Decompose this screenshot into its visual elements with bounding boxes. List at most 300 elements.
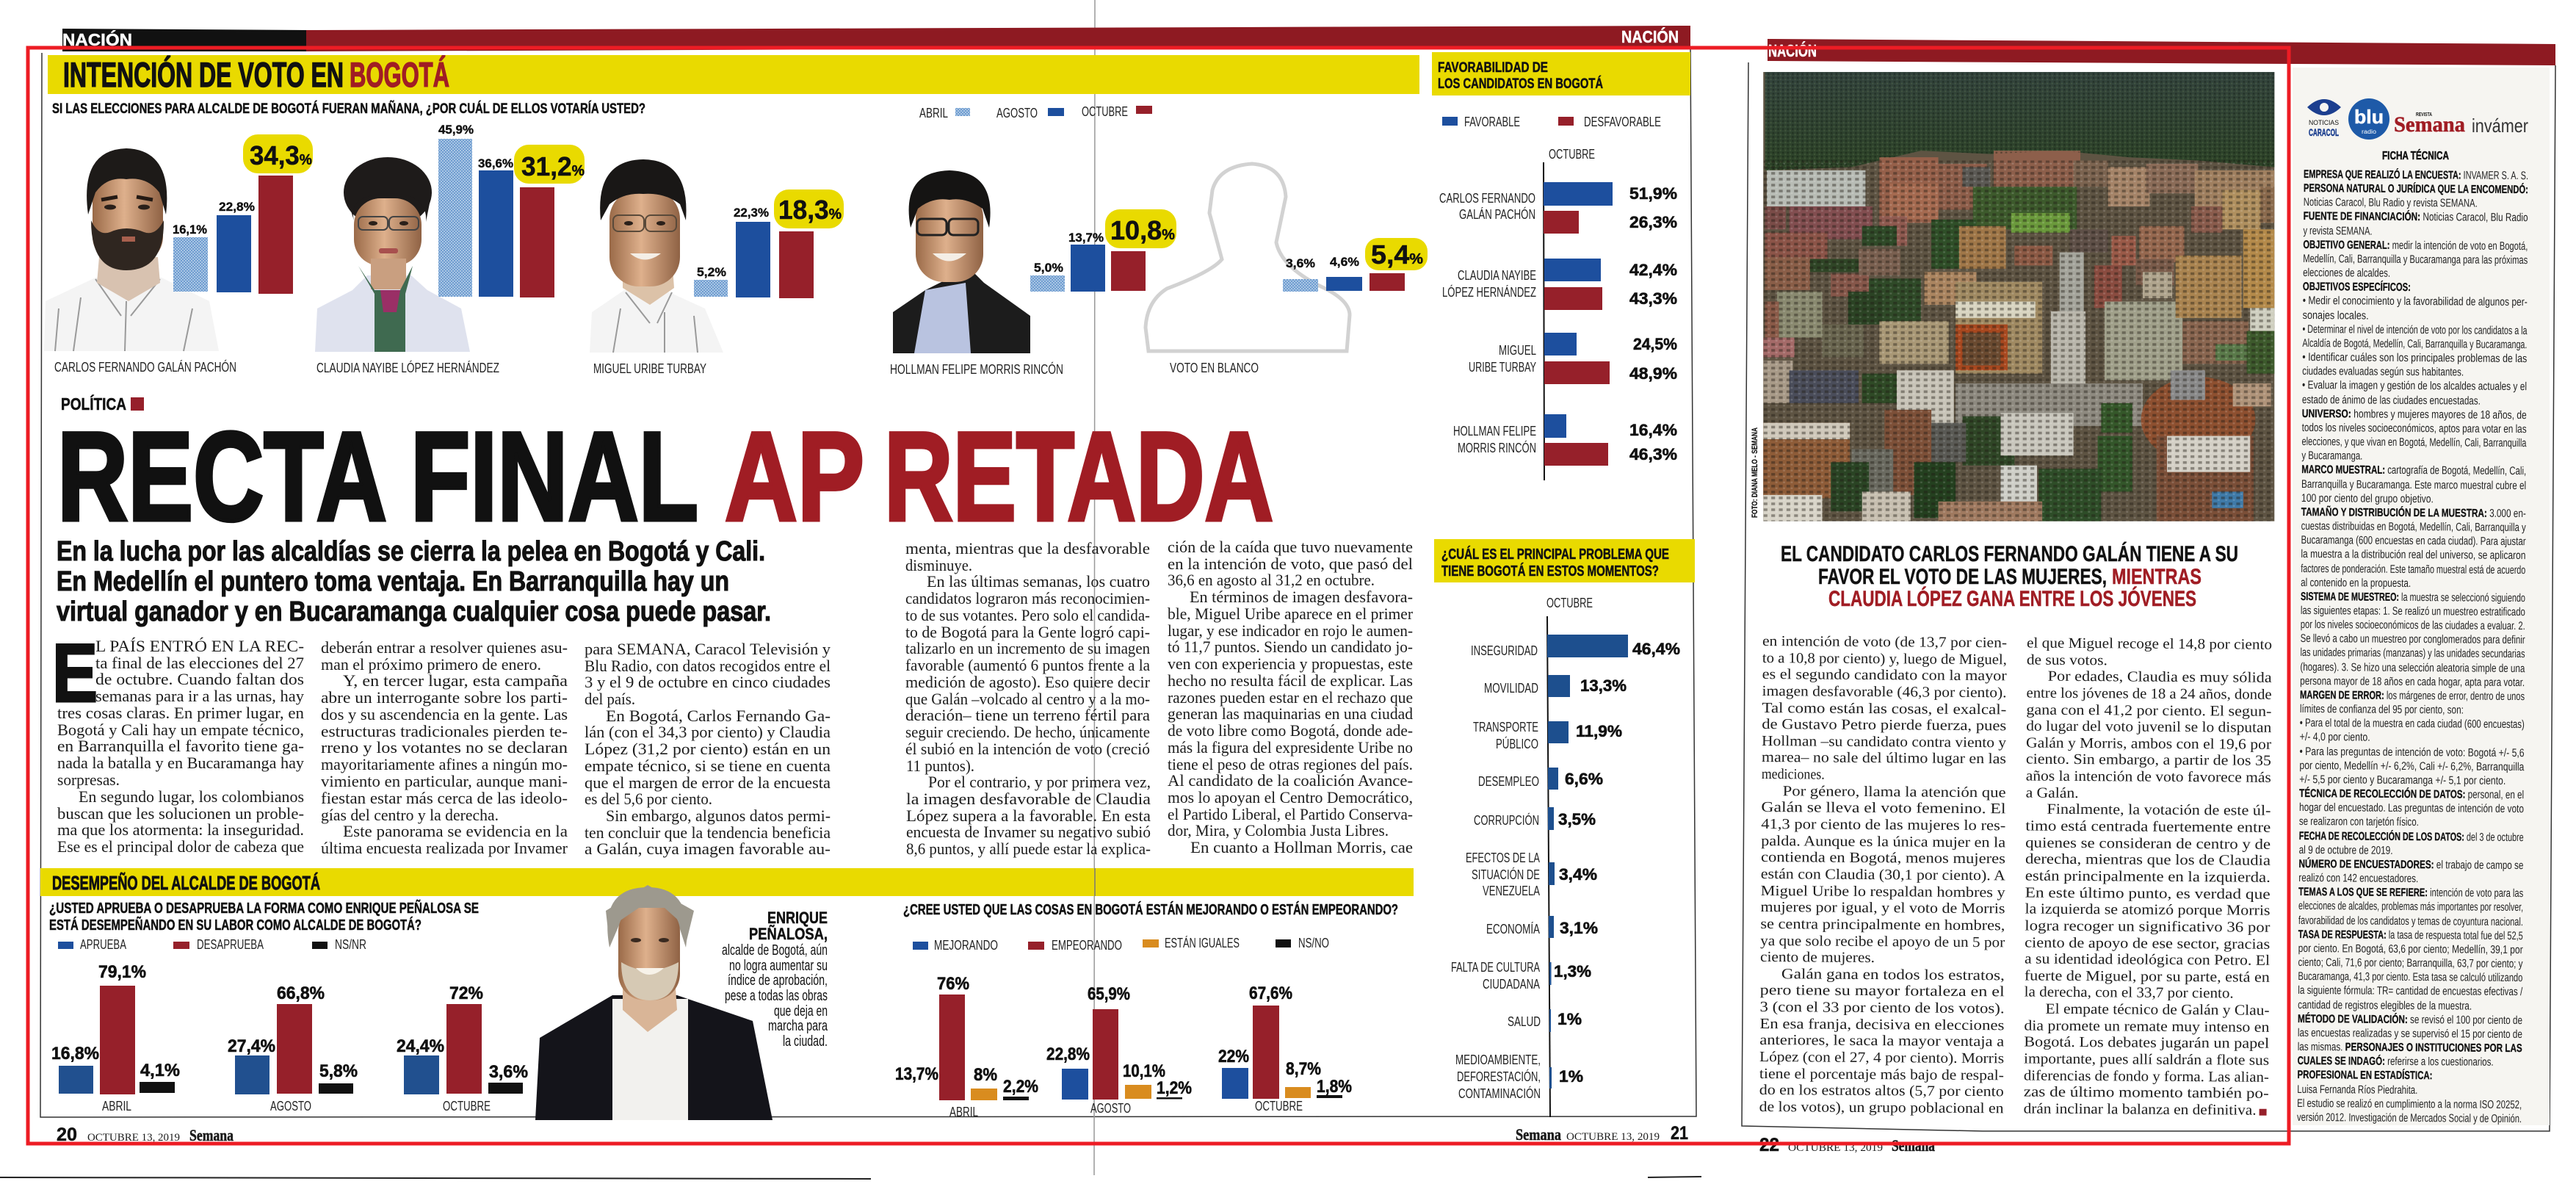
article page 22 column 1: en intención de voto (de 13,7 por cien- bbox=[1762, 633, 2007, 651]
article page 22 column 2: Finalmente, la votación de este úl- bbox=[2047, 801, 2271, 819]
ficha técnica text: FECHA DE RECOLECCIÓN DE LOS DATOS: del 3 de octubre bbox=[2299, 829, 2524, 844]
row: López: 43,3% bbox=[1629, 289, 1677, 308]
article column 3: Blu Radio, con datos recogidos entre el bbox=[585, 657, 831, 675]
callout: Galán bbox=[243, 134, 313, 173]
callout: Uribe: 18,3% bbox=[778, 195, 842, 225]
article page 22 column 1: marea– no sale del último lugar en las bbox=[1762, 749, 2006, 767]
row: López bbox=[1442, 259, 1677, 310]
callout: López: 31,2% bbox=[521, 151, 585, 181]
caption: Peñalosa: PEÑALOSA, bbox=[749, 925, 828, 943]
chart: mejorando abril: 8% bbox=[974, 1065, 997, 1085]
ficha técnica text: • Identificar cuáles son los principales problemas de las bbox=[2302, 351, 2528, 365]
chart: aprobación octubre bbox=[397, 983, 528, 1113]
article column 5: lugar, y ese indicador en rojo le aumen- bbox=[1168, 621, 1413, 640]
article column 4: to de Bogotá para la Gente logró capi- bbox=[905, 623, 1150, 641]
article column 5: ción de la caída que tuvo nuevamente bbox=[1168, 538, 1413, 556]
main headline bbox=[57, 406, 1273, 547]
center fold bbox=[1094, 0, 1095, 1175]
article page 22 column 1: Por género, llama la atención que bbox=[1783, 783, 2006, 801]
legend: mejorando: ESTÁN IGUALES bbox=[1165, 936, 1240, 950]
footer: page 22: OCTUBRE 13, 2019 bbox=[1788, 1142, 1883, 1154]
logo: Blu Radio: blu bbox=[2354, 106, 2384, 128]
logo: Semana: Semana bbox=[2394, 112, 2465, 137]
row: cultura ciudadana: FALTA DE CULTURA bbox=[1451, 960, 1540, 975]
row: corrupción: 3,5% bbox=[1558, 810, 1596, 829]
ficha técnica text: ciudades evaluadas según sus habitantes. bbox=[2302, 365, 2464, 379]
header label page 22: NACIÓN bbox=[1768, 40, 1817, 60]
article page 22 column 1: anteriores, le saca la mayor ventaja a bbox=[1759, 1032, 2004, 1050]
caption: Peñalosa: ENRIQUE bbox=[767, 909, 828, 927]
article column 2: deberán entrar a resolver quienes asu- bbox=[321, 638, 568, 657]
article page 22 column 2: quienes se consideran de centro y de bbox=[2025, 835, 2271, 853]
header band right page bbox=[1768, 39, 2555, 65]
article column 5: generan las maquinarias en una ciudad bbox=[1168, 704, 1413, 723]
heading: favorabilidad: LOS CANDIDATOS EN BOGOTÁ bbox=[1438, 76, 1603, 92]
article page 22 column 1: to a 10,8 por ciento) y, luego de Miguel, bbox=[1762, 650, 2007, 668]
chart: aprobación agosto: 27,4% bbox=[228, 1036, 275, 1056]
chart: aprobación octubre: 3,6% bbox=[489, 1062, 528, 1082]
article column 5: mos lo apoyan el Centro Democrático, bbox=[1168, 788, 1413, 806]
article page 22 column 2: fuerte de Miguel, por su parte, está en bbox=[2025, 968, 2270, 986]
ficha técnica text: 100 por ciento del grupo objetivo. bbox=[2301, 492, 2434, 505]
photo: Bogotá city bbox=[1763, 72, 2274, 521]
bars: López: 36,6% bbox=[478, 156, 513, 170]
row: Morris: MORRIS RINCÓN bbox=[1458, 440, 1536, 455]
row: transporte público: TRANSPORTE bbox=[1473, 720, 1538, 734]
chart: mejorando agosto: 1,2% bbox=[1157, 1078, 1192, 1098]
row: Uribe: MIGUEL bbox=[1499, 343, 1536, 358]
article column 3: es del 5,6 por ciento. bbox=[585, 790, 712, 808]
main headline: RECTA FINAL bbox=[57, 406, 698, 547]
logo: Noticias Caracol bbox=[2307, 99, 2341, 138]
legend: mejorando: EMPEORANDO bbox=[1052, 938, 1122, 953]
legend: intention bbox=[919, 104, 1152, 120]
row: venezuela bbox=[1466, 851, 1597, 898]
article column 5: ble, Miguel Uribe aparece en el primer bbox=[1168, 604, 1414, 623]
ficha técnica text: TASA DE RESPUESTA: la tasa de respuesta total fue del 52,5 bbox=[2298, 928, 2523, 942]
row: cultura ciudadana: 1,3% bbox=[1554, 962, 1591, 981]
article column 1: Ese es el principal dolor de cabeza que bbox=[57, 837, 304, 856]
footer: page 21: Semana bbox=[1516, 1125, 1561, 1144]
drop cap: E bbox=[52, 627, 98, 719]
chart: mejorando abril: 76% bbox=[937, 974, 969, 994]
footer: page 20: Semana bbox=[189, 1126, 234, 1144]
legend: mejorando bbox=[913, 936, 1329, 953]
question: aprobación: ESTÁ DESEMPEÑANDO EN SU LABOR COMO ALCALDE DE BOGOTÁ? bbox=[49, 917, 422, 934]
article column 2: dos y su ascendencia en la gente. Las bbox=[321, 705, 568, 723]
article page 22 column 2: la izquierda se atomizó porque Morris bbox=[2025, 901, 2271, 919]
row: venezuela: 3,4% bbox=[1559, 865, 1597, 884]
caption: Peñalosa: marcha para bbox=[768, 1018, 828, 1034]
article page 22 column 1: ya que solo recibe el apoyo de un 5 por bbox=[1760, 933, 2005, 950]
heading: favorabilidad: FAVORABILIDAD DE bbox=[1438, 60, 1548, 76]
ficha técnica text: PROFESIONAL EN ESTADÍSTICA: bbox=[2297, 1069, 2433, 1082]
article page 22 column 1: ciento de mujeres. bbox=[1760, 949, 1875, 966]
row: López: CLAUDIA NAYIBE bbox=[1458, 268, 1536, 283]
ficha técnica text: UNIVERSO: hombres y mujeres mayores de 18 años, de bbox=[2302, 408, 2527, 422]
article page 22 column 1: 41,3 por ciento de las mujeres lo res- bbox=[1761, 816, 2005, 834]
ficha técnica text: OBJETIVOS ESPECÍFICOS: bbox=[2303, 281, 2411, 294]
row: economía bbox=[1486, 916, 1598, 938]
deck: En la lucha por las alcaldías se cierra la pelea en Bogotá y Cali. bbox=[57, 536, 765, 567]
ficha técnica text: se realizaron con tarjetón físico. bbox=[2299, 815, 2419, 829]
article page 22 column 1: de los votos), un grupo poblacional en bbox=[1759, 1099, 2004, 1116]
row: venezuela: VENEZUELA bbox=[1483, 884, 1540, 898]
article page 22 column 2: logra recoger un significativo 36 por bbox=[2025, 918, 2271, 936]
chart: mejorando octubre: 8,7% bbox=[1286, 1059, 1321, 1079]
chart: mejorando octubre: 1,8% bbox=[1317, 1077, 1352, 1097]
chart: mejorando octubre: 22% bbox=[1218, 1047, 1249, 1066]
article column 2: gías del centro y la derecha. bbox=[321, 806, 499, 824]
photo credit: FOTO: DIANA MELO - SEMANA bbox=[1751, 427, 1759, 518]
heading band: intención de voto bbox=[48, 55, 1419, 94]
row: Morris: 46,3% bbox=[1629, 445, 1677, 463]
chart: mejorando agosto: AGOSTO bbox=[1090, 1101, 1131, 1116]
row: inseguridad: INSEGURIDAD bbox=[1471, 643, 1538, 658]
row: Morris: HOLLMAN FELIPE bbox=[1453, 424, 1536, 438]
bars: voto en blanco bbox=[1283, 238, 1428, 292]
header label left: NACIÓN bbox=[62, 29, 132, 49]
article column 4: candidatos lograron más reconocimien- bbox=[905, 589, 1150, 607]
row: Uribe: 24,5% bbox=[1633, 335, 1677, 353]
footer: page 21: OCTUBRE 13, 2019 bbox=[1566, 1131, 1660, 1143]
article column 1: ma que los atormenta: la inseguridad. bbox=[57, 820, 304, 839]
article page 22 column 2: ciento. Sin embargo, a partir de los 35 bbox=[2026, 751, 2271, 769]
article column 5: hecho no resulta fácil de explicar. Las bbox=[1168, 671, 1413, 690]
article column 2: mayoritariamente afines a ningún mo- bbox=[321, 755, 568, 773]
chart: aprobación abril: 4,1% bbox=[140, 1061, 180, 1080]
article page 22 column 2: ciento de apoyo de ese sector, gracias bbox=[2025, 935, 2270, 953]
heading band: intención de voto: INTENCIÓN DE VOTO EN bbox=[63, 55, 344, 94]
chart: mejorando agosto: 65,9% bbox=[1088, 984, 1130, 1004]
heading: favorabilidad bbox=[1432, 52, 1690, 95]
bars: Uribe: 5,2% bbox=[697, 265, 726, 279]
chart: aprobación octubre: OCTUBRE bbox=[443, 1099, 491, 1113]
legend: aprobación bbox=[58, 937, 366, 952]
header label right: NACIÓN bbox=[1621, 26, 1679, 46]
deck bbox=[57, 536, 771, 627]
footer: page 20: 20 bbox=[57, 1125, 77, 1145]
article column 4: menta, mientras que la desfavorable bbox=[905, 539, 1150, 557]
logos bbox=[2307, 98, 2528, 140]
bars: Galán: 16,1% bbox=[173, 223, 207, 237]
ficha técnica text: límites de confianza del 95 por ciento, son: bbox=[2300, 703, 2464, 717]
main headline: AP bbox=[725, 406, 864, 547]
article column 3: Sin embargo, algunos datos permi- bbox=[606, 806, 831, 825]
panel: principal problema bbox=[1434, 539, 1695, 1117]
ficha técnica text: MÉTODO DE VALIDACIÓN: se revisó el 100 por ciento de bbox=[2298, 1012, 2522, 1027]
ficha técnica text: CUALES SE INDAGÓ: referirse a los cuestionarios. bbox=[2298, 1054, 2494, 1069]
photo: Galán bbox=[44, 148, 219, 351]
article column 2: rreno y los votantes no se declaran bbox=[321, 738, 568, 757]
chart: aprobación agosto bbox=[228, 983, 358, 1113]
legend: intention: OCTUBRE bbox=[1082, 104, 1128, 119]
article column 1: en Barranquilla el favorito tiene ga- bbox=[57, 737, 304, 755]
article column 5: 36,6 en agosto al 31,2 en octubre. bbox=[1168, 571, 1375, 589]
deck: virtual ganador y en Bucaramanga cualquier cosa puede pasar. bbox=[57, 596, 771, 627]
article column 5: En términos de imagen desfavora- bbox=[1190, 588, 1413, 606]
article column 1: L PAÍS ENTRÓ EN LA REC- bbox=[95, 637, 304, 655]
article column 4: seguir creciendo. De hecho, únicamente bbox=[905, 723, 1150, 741]
article page 22 column 1: Miguel Uribe lo respaldan hombres y bbox=[1761, 883, 2005, 900]
article page 22 column 2: de sus votos. bbox=[2027, 652, 2108, 668]
article page 22 column 2: Por edades, Claudia es muy sólida bbox=[2048, 668, 2272, 686]
footer: page 22: 22 bbox=[1759, 1135, 1779, 1155]
row: Morris bbox=[1453, 414, 1677, 466]
row: medioambiente: MEDIOAMBIENTE, bbox=[1455, 1053, 1541, 1067]
article column 2: man el próximo primero de enero. bbox=[321, 655, 541, 674]
article column 4: En las últimas semanas, los cuatro bbox=[927, 572, 1150, 591]
legend: favorabilidad: FAVORABLE bbox=[1464, 115, 1520, 129]
row: Galán: GALÁN PACHÓN bbox=[1459, 206, 1535, 222]
article column 4: la imagen desfavorable de Claudia bbox=[906, 790, 1151, 808]
article column 4: que Galán –volcado al centro y a la mo- bbox=[905, 690, 1150, 708]
ficha técnica text: las mismas. PERSONAJES O INSTITUCIONES POR LAS bbox=[2298, 1041, 2522, 1055]
panel: ficha técnica background bbox=[2293, 68, 2550, 1125]
ficha técnica text: TEMAS A LOS QUE SE REFIERE: intención de voto para las bbox=[2298, 886, 2523, 900]
row: corrupción bbox=[1474, 807, 1596, 830]
article column 3: lán (con el 34,3 por ciento) y Claudia bbox=[585, 723, 831, 741]
row: salud: 1% bbox=[1557, 1010, 1582, 1028]
row: desempleo: DESEMPLEO bbox=[1478, 774, 1539, 789]
article page 22 column 2: derecha, mientras que los de Claudia bbox=[2025, 851, 2271, 869]
article column 1: buscan que les solucionen un proble- bbox=[57, 804, 304, 823]
article column 4: Por el contrario, y por primera vez, bbox=[928, 773, 1151, 791]
article page 22 column 1: Tal como están las cosas, el exalcal- bbox=[1762, 700, 2006, 718]
ficha técnica text: FUENTE DE FINANCIACIÓN: Noticias Caracol, Blu Radio bbox=[2304, 209, 2528, 224]
row: salud bbox=[1508, 1009, 1582, 1032]
article column 2: estructuras tradicionales pierden te- bbox=[321, 722, 568, 740]
article page 22 column 2: a su identidad ideológica con Petro. El bbox=[2025, 951, 2271, 969]
question: intention: SI LAS ELECCIONES PARA ALCALDE DE BOGOTÁ FUERAN MAÑANA, ¿POR CUÁL DE ELLOS VOTARÍA USTED? bbox=[52, 101, 645, 117]
article page 22 column 2: a Galán. bbox=[2026, 785, 2079, 801]
headline page 22 bbox=[1781, 541, 2238, 611]
footer: page 20 bbox=[57, 1125, 234, 1145]
caption: Peñalosa: no logra aumentar su bbox=[729, 958, 828, 974]
headline page 22: FAVOR EL VOTO DE LAS MUJERES, bbox=[1818, 565, 2107, 589]
legend: aprobación: DESAPRUEBA bbox=[197, 937, 264, 952]
row: Uribe: 48,9% bbox=[1629, 364, 1677, 383]
article column 4: deración– tiene un terreno fértil para bbox=[905, 706, 1150, 724]
caption: Peñalosa bbox=[722, 909, 828, 1050]
article page 22 column 2: El empate técnico de Galán y Clau- bbox=[2045, 1001, 2270, 1019]
row: Galán: CARLOS FERNANDO bbox=[1439, 191, 1535, 206]
chart: mejorando abril: 2,2% bbox=[1003, 1077, 1038, 1097]
logo: Semana: REVISTA bbox=[2416, 112, 2432, 118]
article page 22 column 2: están principalmente en la izquierda. bbox=[2025, 868, 2271, 886]
logo: Blu Radio: radio bbox=[2362, 129, 2377, 135]
article page 22 column 2: el que Miguel recoge el 14,8 por ciento bbox=[2027, 635, 2272, 653]
row: medioambiente: CONTAMINACIÓN bbox=[1458, 1086, 1541, 1101]
row: medioambiente bbox=[1455, 1053, 1583, 1101]
panel: favorabilidad bbox=[1432, 52, 1690, 480]
row: inseguridad bbox=[1471, 635, 1680, 658]
headline page 22: MIENTRAS bbox=[2112, 565, 2201, 589]
chart: aprobación agosto: AGOSTO bbox=[270, 1099, 311, 1113]
photo: Uribe bbox=[590, 159, 723, 353]
article page 22 column 1: En esa franja, decisiva en elecciones bbox=[1759, 1016, 2005, 1033]
bottom page edge bbox=[0, 1177, 1701, 1179]
row: salud: SALUD bbox=[1508, 1014, 1541, 1029]
footer: page 21 bbox=[1516, 1123, 1688, 1144]
legend: favorabilidad bbox=[1442, 115, 1661, 129]
ficha técnica text: sonajes locales. bbox=[2303, 309, 2369, 322]
row: Uribe bbox=[1469, 333, 1677, 384]
article column 5: En cuanto a Hollman Morris, cae bbox=[1190, 838, 1413, 856]
article column 4 bbox=[905, 539, 1151, 858]
logo: Invamer: invámer bbox=[2472, 115, 2528, 137]
ficha técnica text: Luisa Fernanda Ríos Piedrahita. bbox=[2297, 1083, 2417, 1097]
bars: Galán bbox=[173, 134, 313, 294]
article column 3: En Bogotá, Carlos Fernando Ga- bbox=[606, 707, 831, 725]
bars: Morris: 5,0% bbox=[1034, 261, 1063, 275]
row: corrupción: CORRUPCIÓN bbox=[1474, 812, 1539, 828]
row: desempleo bbox=[1478, 768, 1603, 790]
article column 3 bbox=[585, 640, 831, 858]
name: voto en blanco: VOTO EN BLANCO bbox=[1170, 361, 1259, 375]
article column 1: semanas para ir a las urnas, hay bbox=[95, 687, 304, 705]
row: transporte público bbox=[1473, 720, 1622, 751]
question: mejorando: ¿CREE USTED QUE LAS COSAS EN BOGOTÁ ESTÁN MEJORANDO O ESTÁN EMPEORANDO? bbox=[903, 901, 1398, 918]
article page 22 column 2: do lugar del voto juvenil se lo disputan bbox=[2026, 718, 2271, 736]
article page 22 column 2: Galán y Morris, ambos con el 19,6 por bbox=[2026, 735, 2272, 753]
article column 3: del país. bbox=[585, 690, 635, 708]
article page 22 column 1: imagen desfavorable (46,3 por ciento). bbox=[1762, 683, 2007, 701]
article column 5: el Partido Liberal, el Partido Conserva- bbox=[1168, 805, 1413, 823]
ficha técnica text: y Bucaramanga. bbox=[2301, 450, 2362, 463]
chart: mejorando agosto bbox=[1046, 984, 1192, 1116]
article page 22 column 2: zas de último momento también po- bbox=[2024, 1083, 2269, 1102]
legend: intention: ABRIL bbox=[919, 106, 948, 120]
question: aprobación: ¿USTED APRUEBA O DESAPRUEBA LA FORMA COMO ENRIQUE PEÑALOSA SE bbox=[49, 900, 479, 917]
legend: mejorando: NS/NO bbox=[1298, 936, 1329, 950]
logo: Noticias Caracol: CARACOL bbox=[2309, 126, 2339, 138]
article column 4: encuesta de Invamer su negativo subió bbox=[906, 823, 1151, 841]
ficha técnica text: elecciones de alcaldes. bbox=[2303, 267, 2390, 280]
article column 2: última encuesta realizada por Invamer bbox=[321, 839, 568, 857]
article page 22 column 2: gana con el 41,2 por ciento. El segun- bbox=[2026, 702, 2271, 720]
row: desempleo: 6,6% bbox=[1565, 770, 1603, 788]
article page 22 column 2: entre los jóvenes de 18 a 24 años, donde bbox=[2026, 685, 2272, 703]
article page 22 column 1: pero tiene su mayor fortaleza en el bbox=[1760, 982, 2005, 1000]
bars: Galán: 22,8% bbox=[219, 200, 255, 214]
article column 1: nada la batalla y en Bucaramanga hay bbox=[57, 754, 304, 772]
article page 22 column 2: años la intención de voto favorece más bbox=[2026, 768, 2271, 786]
header band left spread bbox=[62, 26, 1690, 51]
article page 22 column 1: López (con el 27, 4 por ciento). Morris bbox=[1759, 1049, 2004, 1066]
ficha técnica text: MARCO MUESTRAL: cartografía de Bogotá, Medellín, Cali, bbox=[2301, 463, 2526, 477]
chart: mejorando octubre bbox=[1218, 983, 1352, 1113]
heading: principal problema bbox=[1434, 539, 1695, 582]
row: venezuela: EFECTOS DE LA bbox=[1466, 851, 1540, 865]
article page 22 column 1: do en los estratos altos (5,7 por ciento bbox=[1759, 1082, 2004, 1100]
article page 22 column 1: están con Claudia (30,1 por ciento). A bbox=[1761, 866, 2005, 884]
article column 1: tres cosas claras. En primer lugar, en bbox=[57, 704, 304, 722]
row: movilidad: 13,3% bbox=[1580, 676, 1627, 695]
article column 5: ven con experiencia y propuestas, este bbox=[1168, 654, 1413, 673]
chart: aprobación agosto: 66,8% bbox=[277, 983, 325, 1003]
row: Galán: 51,9% bbox=[1629, 184, 1677, 203]
ficha técnica text: +/- 5,5 por ciento y Bucaramanga +/- 5,1 por ciento. bbox=[2299, 773, 2506, 787]
article column 5: de voto libre como Bogotá, donde ade- bbox=[1168, 721, 1413, 740]
chart: mejorando abril bbox=[895, 974, 1038, 1119]
article column 4: talizarlo en un incremento de su imagen bbox=[905, 639, 1150, 657]
chart: mejorando octubre: OCTUBRE bbox=[1255, 1099, 1303, 1113]
ficha técnica text: cantidad de registros elegibles de la muestra. bbox=[2298, 999, 2472, 1013]
row: medioambiente: 1% bbox=[1559, 1067, 1583, 1086]
logo: Blu Radio bbox=[2348, 98, 2389, 140]
callout: voto en blanco: 5,4% bbox=[1371, 239, 1423, 270]
article column 5: en la intención de voto, que pasó del bbox=[1168, 555, 1413, 573]
chart: aprobación agosto: 5,8% bbox=[319, 1061, 358, 1081]
row: Morris: 16,4% bbox=[1629, 421, 1677, 439]
article page 22 column 2: importante, pues allí saldrán a flote sus bbox=[2024, 1050, 2269, 1069]
footer: page 22: Semana bbox=[1892, 1136, 1935, 1155]
footer: page 21: 21 bbox=[1671, 1123, 1688, 1144]
article page 22 column 1: mujeres por igual, y el voto de Morris bbox=[1760, 899, 2005, 917]
ficha técnica text: TAMAÑO Y DISTRIBUCIÓN DE LA MUESTRA: 3.000 en- bbox=[2301, 505, 2526, 520]
article column 2: abre un interrogante sobre los parti- bbox=[321, 688, 568, 707]
ficha técnica text: OBJETIVO GENERAL: medir la intención de voto en Bogotá, bbox=[2303, 239, 2528, 253]
row: cultura ciudadana: CIUDADANA bbox=[1483, 977, 1540, 992]
ficha técnica text: MARGEN DE ERROR: los márgenes de error, dentro de unos bbox=[2300, 689, 2525, 703]
footer: page 20: OCTUBRE 13, 2019 bbox=[87, 1132, 180, 1144]
article page 22 column 1: Galán gana en todos los estratos, bbox=[1781, 966, 2005, 983]
article column 4: disminuye. bbox=[905, 556, 972, 574]
article page 22 column 1: Galán se lleva el voto femenino. El bbox=[1761, 799, 2006, 817]
chart: mejorando abril: 13,7% bbox=[895, 1064, 938, 1084]
article page 22 column 1: se centra principalmente en hombres, bbox=[1760, 916, 2005, 934]
chart: aprobación abril: 16,8% bbox=[51, 1044, 99, 1064]
row: Galán: 26,3% bbox=[1629, 213, 1677, 231]
chart: aprobación abril: ABRIL bbox=[102, 1099, 131, 1113]
article column 1 bbox=[57, 637, 304, 856]
photo: López bbox=[315, 157, 470, 352]
row: inseguridad: 46,4% bbox=[1632, 640, 1680, 658]
article column 4: to de sus votantes. Pero solo el candida- bbox=[905, 606, 1150, 624]
article page 22 column 1: es el segundo candidato con la mayor bbox=[1762, 666, 2007, 684]
article column 2: Este panorama se evidencia en la bbox=[343, 822, 568, 840]
ficha técnica title: FICHA TÉCNICA bbox=[2382, 148, 2449, 162]
article column 2: Y, en tercer lugar, esta campaña bbox=[343, 671, 568, 690]
ficha técnica text bbox=[2297, 167, 2529, 1125]
article page 22 column 2: drán inclinar la balanza en definitiva. bbox=[2024, 1100, 2257, 1119]
article column 3: 3 y el 9 de octubre en cinco ciudades bbox=[585, 673, 831, 691]
ficha técnica text: al 9 de octubre de 2019. bbox=[2299, 844, 2393, 857]
article column 3: para SEMANA, Caracol Televisión y bbox=[585, 640, 831, 658]
ficha técnica text: SISTEMA DE MUESTREO: la muestra se seleccionó siguiendo bbox=[2301, 591, 2525, 604]
article page 22 column 1: palda. Aunque es la única mujer en la bbox=[1761, 833, 2005, 851]
article page 22 column 1: Hollman –su candidato contra viento y bbox=[1762, 733, 2006, 751]
ficha técnica text: +/- 4,0 por ciento. bbox=[2300, 731, 2370, 744]
name: López: CLAUDIA NAYIBE LÓPEZ HERNÁNDEZ bbox=[316, 360, 499, 375]
article page 22 column 2: En este último punto, es verdad que bbox=[2025, 885, 2271, 903]
row: transporte público: PÚBLICO bbox=[1496, 736, 1538, 751]
chart: aprobación octubre: 72% bbox=[449, 983, 483, 1003]
ficha técnica text: al contenido en la propuesta. bbox=[2301, 577, 2411, 590]
article page 22 column 1: mediciones. bbox=[1762, 766, 1825, 783]
article page 22 column 2 bbox=[2024, 635, 2273, 1119]
chart: aprobación abril: 79,1% bbox=[98, 962, 146, 982]
footer: page 22 bbox=[1759, 1135, 1935, 1155]
article column 5 bbox=[1168, 538, 1414, 856]
ficha técnica text: por ciento, Medellín +/- 6,2%, Cali +/- 6,2%, Barranquilla bbox=[2299, 759, 2525, 773]
bars: Uribe bbox=[694, 189, 844, 298]
bars: Uribe: 22,3% bbox=[734, 206, 769, 220]
article column 3: a Galán, cuya imagen favorable au- bbox=[585, 840, 831, 858]
bars: López bbox=[438, 123, 585, 297]
article column 4: medición de agosto). Eso quiere decir bbox=[905, 673, 1151, 691]
